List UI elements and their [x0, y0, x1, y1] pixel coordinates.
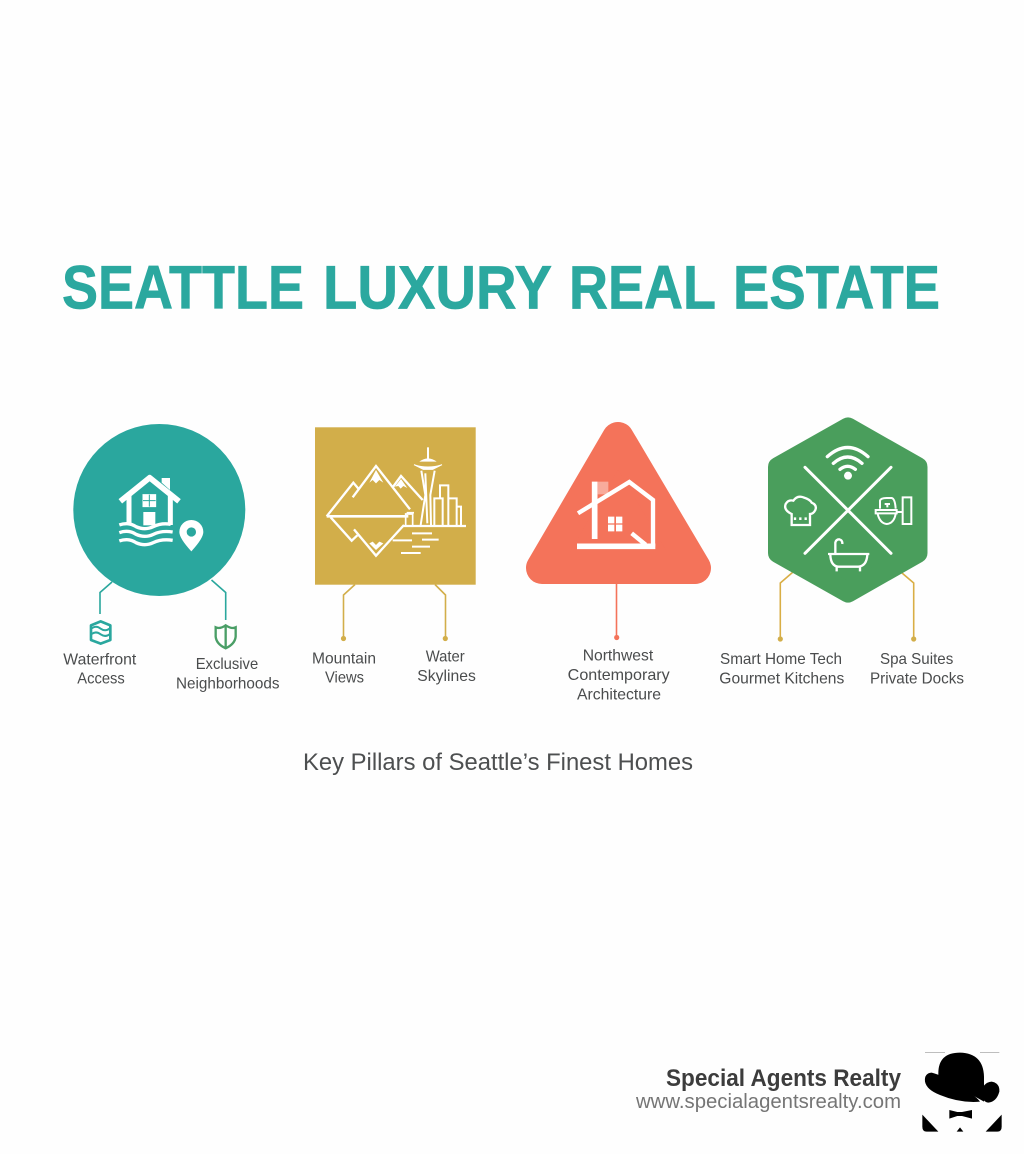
label: Waterfront Access: [63, 651, 137, 687]
label: Waterfront Access: Waterfront: [63, 651, 137, 668]
footer: website: www.specialagentsrealty.com: [635, 1091, 901, 1113]
label: Mountain Views: [312, 650, 376, 686]
label: Smart Home Tech Gourmet Kitchens: [719, 651, 844, 687]
connector: architecture: [614, 584, 619, 640]
label: Northwest Contemporary Architecture: Northwest: [583, 648, 654, 665]
label: Smart Home Tech Gourmet Kitchens: Smart Home Tech: [720, 651, 842, 668]
connector: smart home and kitchens: [778, 572, 793, 642]
green hexagon: [778, 428, 918, 592]
label: Water Skylines: [417, 649, 476, 685]
connector: waterfront: [100, 582, 112, 614]
icon: amenity symbols: [785, 447, 911, 571]
title: ESTATE: [733, 253, 940, 321]
teal circle: [73, 424, 245, 596]
panel: amenities: [719, 428, 964, 687]
label: Exclusive Neighborhoods: Exclusive: [196, 656, 258, 673]
connector: neighborhoods: [212, 580, 226, 620]
panel: architecture: [542, 438, 695, 703]
icon: mountains and skyline: [327, 447, 466, 556]
icon: wifi: [827, 447, 868, 480]
label: Northwest Contemporary Architecture: Contemporary: [568, 667, 670, 684]
label: Smart Home Tech Gourmet Kitchens: Gourmet Kitchens: [719, 670, 844, 687]
label: Exclusive Neighborhoods: [176, 656, 280, 692]
label: Exclusive Neighborhoods: Neighborhoods: [176, 675, 280, 692]
cross lines: [805, 467, 891, 553]
title: REAL: [569, 253, 716, 321]
label: Mountain Views: Views: [325, 669, 364, 686]
connector: water skylines: [435, 584, 448, 641]
label: Northwest Contemporary Architecture: Architecture: [577, 686, 661, 703]
label: Spa Suites Private Docks: Spa Suites: [880, 651, 953, 668]
title: [62, 253, 940, 321]
panel: views: [312, 427, 476, 686]
label: Mountain Views: Mountain: [312, 650, 376, 667]
label: Northwest Contemporary Architecture: [568, 648, 670, 703]
coral triangle: [542, 438, 695, 568]
icon: shield: [216, 625, 236, 648]
connector: mountain views: [341, 584, 355, 641]
title: SEATTLE: [62, 253, 304, 321]
icon: bathtub: [828, 539, 869, 571]
connector: spa and docks: [902, 573, 916, 642]
icon: agent logo: [922, 1052, 1002, 1132]
label: Waterfront Access: Access: [77, 670, 125, 687]
icon: contemporary house: [577, 482, 655, 547]
gold square: [315, 427, 476, 585]
footer: brand name: Special Agents Realty: [666, 1065, 902, 1092]
icon: chef hat: [785, 497, 816, 525]
label: Spa Suites Private Docks: Private Docks: [870, 670, 964, 687]
label: Water Skylines: Skylines: [417, 668, 476, 685]
title: LUXURY: [323, 253, 552, 321]
label: Water Skylines: Water: [426, 649, 465, 666]
label: Spa Suites Private Docks: [870, 651, 964, 687]
panel: waterfront and neighborhoods: [63, 424, 279, 692]
icon: dock fixture: [876, 497, 911, 524]
subtitle: Key Pillars of Seattle’s Finest Homes: [303, 749, 693, 776]
icon: waves hexagon: [91, 621, 110, 644]
icon: house on water with pin: [119, 478, 203, 551]
